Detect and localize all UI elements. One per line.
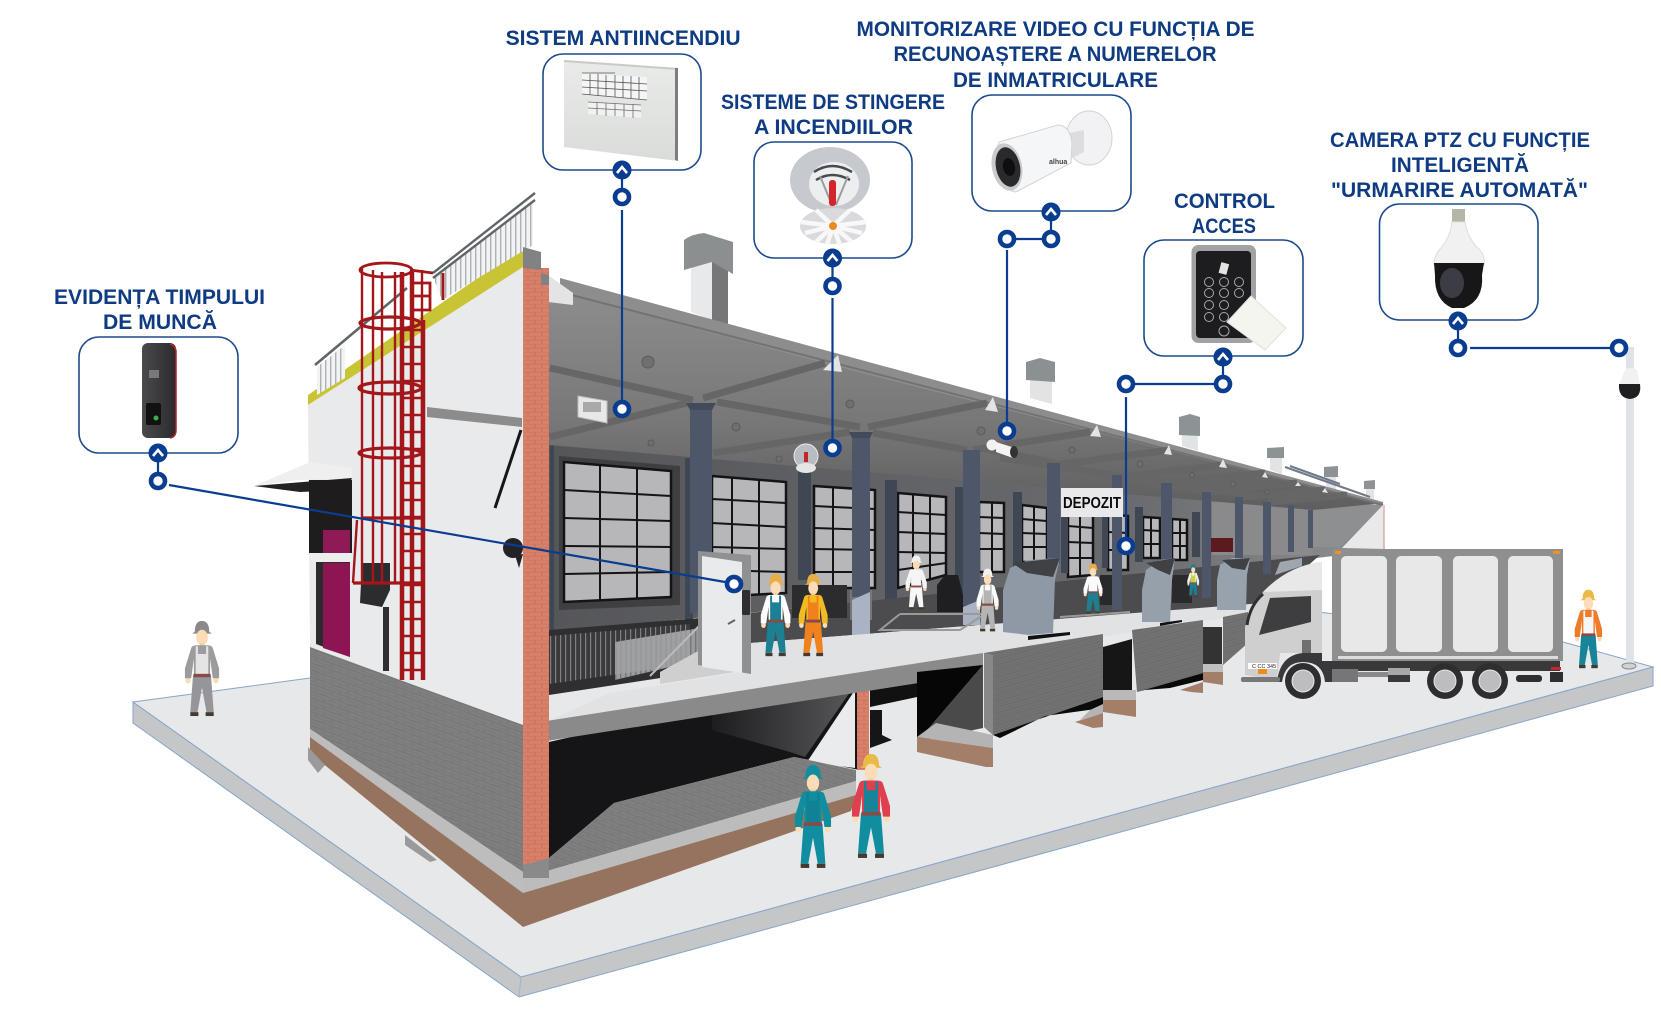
icon: PTZ dome bbox=[1434, 209, 1484, 308]
heading: CONTROL bbox=[1174, 190, 1275, 213]
icon: fire panel bbox=[564, 60, 678, 161]
heading: CAMERA PTZ CU FUNCȚIE bbox=[1330, 129, 1590, 152]
background machinery bbox=[792, 575, 1192, 620]
icon: keypad bbox=[1192, 245, 1286, 350]
worker: white shirt bbox=[1084, 564, 1102, 613]
callout: fire alarm bbox=[506, 27, 741, 170]
roof corner brackets bbox=[548, 275, 1328, 493]
heading: DE MUNCĂ bbox=[103, 311, 217, 334]
truck: C CC 345 bbox=[1252, 664, 1276, 670]
mini sprinkler in scene bbox=[794, 444, 818, 473]
worker: blue overalls bbox=[761, 574, 790, 656]
stair railing bbox=[549, 618, 735, 695]
workers bbox=[185, 556, 1602, 868]
callout: video monitoring bbox=[856, 18, 1254, 211]
brick corner column bbox=[523, 247, 549, 878]
building foundation bbox=[523, 781, 856, 927]
heading: ACCES bbox=[1192, 215, 1256, 238]
window 5 bbox=[979, 502, 1004, 572]
left outer wall bbox=[254, 267, 523, 725]
frame bbox=[972, 95, 1131, 211]
wall blob bbox=[503, 538, 523, 568]
loading dock 2 bbox=[1103, 620, 1203, 717]
worker: teal front bbox=[795, 765, 831, 868]
chimney 5 bbox=[1324, 466, 1338, 490]
frame bbox=[754, 142, 912, 258]
ceiling bbox=[548, 275, 1383, 510]
window 1 bbox=[564, 462, 671, 602]
red ladder and safety cage bbox=[353, 263, 443, 680]
heading: MONITORIZARE VIDEO CU FUNCȚIA DE bbox=[856, 18, 1254, 41]
second recess bbox=[360, 563, 390, 671]
icon: bullet camera bbox=[987, 111, 1112, 194]
callout: access control bbox=[1144, 190, 1303, 356]
leveller 3 bbox=[1217, 558, 1250, 610]
window 3 bbox=[814, 486, 875, 588]
depozit sign: DEPOZIT bbox=[1063, 495, 1121, 512]
ceiling lamps bbox=[642, 356, 1269, 494]
connector: access control bbox=[1119, 348, 1232, 553]
canopy bbox=[254, 462, 352, 492]
mini fire panel in scene bbox=[578, 396, 607, 423]
chimney 3 bbox=[1179, 414, 1200, 451]
upper floor dark area bbox=[700, 555, 1320, 643]
connector: video camera bbox=[1000, 202, 1060, 438]
heading: SISTEME DE STINGERE bbox=[721, 91, 945, 114]
leveller 4 bbox=[1275, 558, 1302, 575]
wall crack line bbox=[495, 430, 521, 508]
roof railing bbox=[315, 193, 535, 395]
chimney 2 bbox=[1026, 358, 1055, 404]
connector: time tracking to door bbox=[148, 444, 741, 591]
window 8 bbox=[1108, 514, 1128, 570]
dock levellers bbox=[1003, 558, 1302, 640]
heading: A INCENDIILOR bbox=[754, 116, 913, 139]
icon: fingerprint reader bbox=[142, 343, 176, 438]
connector: PTZ camera bbox=[1448, 312, 1626, 355]
heading: DE INMATRICULARE bbox=[953, 69, 1158, 92]
chimney 4 bbox=[1267, 447, 1284, 474]
basement floor bbox=[523, 757, 856, 878]
roof chimneys bbox=[684, 233, 1375, 500]
loading dock 3 bbox=[1203, 612, 1248, 685]
frame bbox=[543, 54, 701, 170]
callout: time tracking bbox=[54, 286, 265, 453]
worker: yellow vest bbox=[1187, 564, 1199, 597]
ceiling beams bbox=[550, 363, 1347, 502]
back wall with windows bbox=[549, 440, 1383, 633]
back pilasters bbox=[550, 443, 1200, 633]
basement bbox=[523, 673, 917, 878]
chassis bbox=[1277, 653, 1560, 682]
frame bbox=[1380, 204, 1538, 320]
cargo box bbox=[1332, 549, 1563, 661]
callout: sprinklers bbox=[721, 91, 945, 258]
leveller 1 bbox=[1003, 558, 1070, 640]
frame bbox=[1144, 240, 1303, 356]
heading: RECUNOAȘTERE A NUMERELOR bbox=[894, 43, 1216, 66]
worker: red shirt bbox=[852, 754, 890, 858]
icon: sprinkler bbox=[790, 147, 870, 245]
leveller 2 bbox=[1142, 558, 1182, 626]
plate and bumper bbox=[1248, 663, 1277, 669]
door with fingerprint reader bbox=[698, 551, 751, 674]
worker: orange right bbox=[1575, 590, 1602, 668]
chimney 1 bbox=[684, 233, 733, 325]
front columns bbox=[686, 403, 1313, 638]
worker: grey bbox=[185, 621, 219, 716]
yellow roof edge bbox=[308, 247, 523, 405]
heading: EVIDENȚA TIMPULUI bbox=[54, 286, 265, 309]
window 2 bbox=[712, 476, 786, 597]
slab front face bbox=[540, 653, 983, 742]
concrete lintel bbox=[427, 407, 522, 427]
slab top surface bbox=[550, 603, 1263, 720]
concrete floor slab bbox=[540, 603, 1263, 742]
mini camera in scene bbox=[986, 440, 1018, 458]
connector: sprinkler bbox=[823, 248, 842, 455]
connector: fire alarm bbox=[612, 160, 632, 416]
entrance recess bbox=[309, 480, 352, 657]
mini fingerprint reader bbox=[742, 590, 750, 615]
heading: SISTEM ANTIINCENDIU bbox=[506, 27, 741, 50]
worker: orange overalls bbox=[799, 574, 828, 656]
chimney 6 bbox=[1364, 480, 1375, 500]
street pole with PTZ camera bbox=[1619, 347, 1640, 669]
lower grey brick wall bbox=[308, 647, 523, 927]
loading dock 1 bbox=[917, 634, 1103, 767]
far end wall bbox=[1313, 505, 1385, 549]
wheels bbox=[1285, 663, 1508, 699]
heading: INTELIGENTĂ bbox=[1391, 154, 1529, 177]
window 10 bbox=[1172, 519, 1187, 560]
window 9 bbox=[1143, 517, 1160, 558]
cab bbox=[1245, 562, 1322, 680]
callout: PTZ camera bbox=[1330, 129, 1590, 320]
truck bbox=[1241, 549, 1563, 699]
window 6 bbox=[1022, 505, 1047, 562]
dark opening next to the small column bbox=[870, 673, 917, 707]
worker: white suit bbox=[906, 556, 927, 609]
heading: "URMARIRE AUTOMATĂ" bbox=[1331, 179, 1588, 202]
ground slab bbox=[133, 600, 1653, 997]
depozit sign bbox=[1061, 488, 1123, 517]
window 4 bbox=[898, 493, 946, 588]
maroon door bbox=[323, 563, 350, 657]
worker: grey overalls bbox=[977, 569, 999, 631]
window 7 bbox=[1068, 510, 1093, 577]
frame bbox=[79, 337, 238, 453]
cab window bbox=[1259, 596, 1311, 635]
icon: bullet camera: alhua bbox=[1049, 159, 1067, 166]
